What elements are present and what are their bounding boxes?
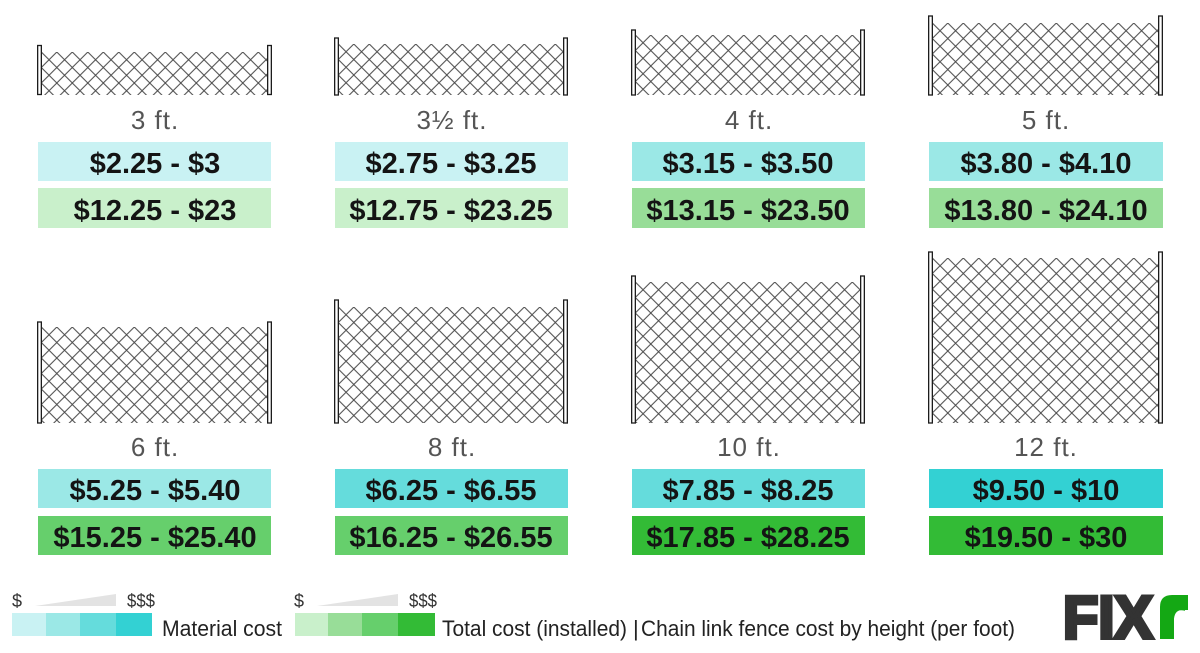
legend: material cost: $ bbox=[12, 591, 22, 611]
fence: 8 ft bbox=[335, 300, 567, 423]
total cost: 8 ft: $16.25 - $26.55 bbox=[349, 522, 553, 554]
material cost: 5 ft bbox=[929, 142, 1163, 181]
fence: 5 ft bbox=[929, 16, 1162, 95]
material cost: 3 1/2 ft: $2.75 - $3.25 bbox=[366, 148, 536, 180]
material cost: 3 1/2 ft bbox=[335, 142, 568, 181]
legend: material cost: Material cost bbox=[162, 616, 282, 641]
material cost: 6 ft bbox=[38, 469, 271, 508]
logo: Fixr: FIX bbox=[1063, 584, 1153, 651]
total cost: 4 ft bbox=[632, 188, 865, 228]
panel: 10 ft bbox=[632, 276, 865, 555]
material cost: 6 ft: $5.25 - $5.40 bbox=[70, 475, 240, 507]
total cost: 3 1/2 ft bbox=[335, 188, 568, 228]
height label: 5 ft: 5 ft. bbox=[1022, 105, 1070, 135]
logo: Fixr: r bbox=[1160, 578, 1186, 653]
panel: 12 ft bbox=[929, 252, 1163, 555]
height label: 3 ft: 3 ft. bbox=[131, 105, 179, 135]
total cost: 3 1/2 ft: $12.75 - $23.25 bbox=[349, 195, 553, 227]
panel: 3 ft bbox=[38, 46, 271, 228]
legend: material cost: $$$ bbox=[127, 591, 155, 611]
legend: material cost bbox=[12, 591, 282, 641]
legend: total cost: $ bbox=[294, 591, 304, 611]
total cost: 5 ft bbox=[929, 188, 1163, 228]
material cost: 12 ft bbox=[929, 469, 1163, 508]
fence: 3 ft bbox=[38, 46, 271, 95]
total cost: 12 ft bbox=[929, 516, 1163, 555]
material cost: 3 ft bbox=[38, 142, 271, 181]
fence: 10 ft bbox=[632, 276, 864, 423]
height label: 4 ft: 4 ft. bbox=[725, 105, 773, 135]
caption: | bbox=[633, 616, 639, 641]
total cost: 10 ft: $17.85 - $28.25 bbox=[646, 522, 850, 554]
material cost: 12 ft: $9.50 - $10 bbox=[973, 475, 1119, 507]
legend: total cost: Total cost (installed) bbox=[442, 616, 627, 641]
material cost: 4 ft bbox=[632, 142, 865, 181]
caption: Chain link fence cost by height (per foot) bbox=[641, 616, 1015, 641]
height label: 8 ft: 8 ft. bbox=[428, 432, 476, 462]
height label: 6 ft: 6 ft. bbox=[131, 432, 179, 462]
legend: total cost: $$$ bbox=[409, 591, 437, 611]
panel: 6 ft bbox=[38, 322, 271, 555]
material cost: 10 ft bbox=[632, 469, 865, 508]
total cost: 4 ft: $13.15 - $23.50 bbox=[646, 195, 850, 227]
panel: 8 ft bbox=[335, 300, 568, 555]
total cost: 3 ft: $12.25 - $23 bbox=[74, 195, 236, 227]
material cost: 4 ft: $3.15 - $3.50 bbox=[663, 148, 833, 180]
height label: 10 ft: 10 ft. bbox=[717, 432, 781, 462]
fence: 6 ft bbox=[38, 322, 271, 423]
material cost: 10 ft: $7.85 - $8.25 bbox=[663, 475, 833, 507]
material cost: 3 ft: $2.25 - $3 bbox=[90, 148, 220, 180]
fence: 12 ft bbox=[929, 252, 1162, 423]
total cost: 5 ft: $13.80 - $24.10 bbox=[944, 195, 1148, 227]
legend: total cost bbox=[294, 591, 627, 641]
material cost: 8 ft: $6.25 - $6.55 bbox=[366, 475, 536, 507]
panel: 4 ft bbox=[632, 30, 865, 228]
height label: 12 ft: 12 ft. bbox=[1014, 432, 1078, 462]
total cost: 6 ft: $15.25 - $25.40 bbox=[53, 522, 257, 554]
total cost: 12 ft: $19.50 - $30 bbox=[965, 522, 1127, 554]
material cost: 8 ft bbox=[335, 469, 568, 508]
material cost: 5 ft: $3.80 - $4.10 bbox=[961, 148, 1131, 180]
height label: 3 1/2 ft: 3½ ft. bbox=[416, 105, 488, 135]
panel: 5 ft bbox=[929, 16, 1163, 228]
logo: Fixr bbox=[1063, 578, 1188, 653]
fence: 3 1/2 ft bbox=[335, 38, 567, 95]
panel: 3 1/2 ft bbox=[335, 38, 568, 228]
total cost: 3 ft bbox=[38, 188, 271, 228]
fence: 4 ft bbox=[632, 30, 864, 95]
